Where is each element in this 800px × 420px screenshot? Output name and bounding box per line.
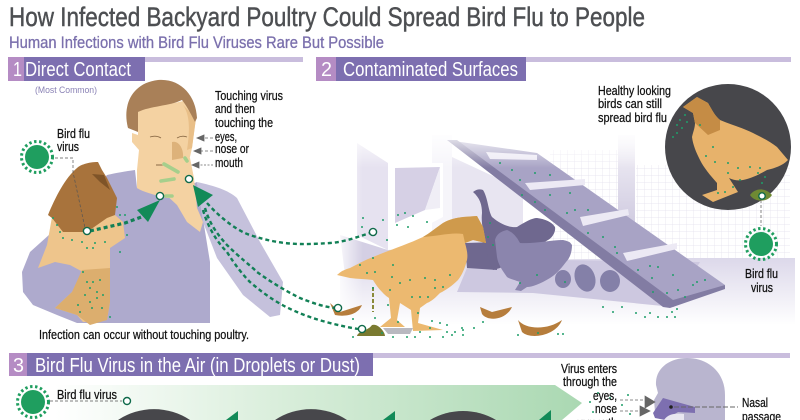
- path markers: [83, 175, 765, 333]
- connector line: [760, 200, 762, 226]
- label: nasal passage: [742, 395, 781, 420]
- label: healthy birds: birds can still: [598, 96, 662, 111]
- pan: [383, 328, 413, 334]
- entry arrows: [620, 396, 655, 416]
- icon: virus: [22, 142, 52, 172]
- nest box: [388, 163, 443, 243]
- inset: healthy looking hen: [665, 84, 791, 210]
- arrowheads: [137, 185, 213, 222]
- man's body: [22, 170, 210, 323]
- section 1 heading: Direct Contact: [25, 59, 131, 81]
- nasal passage: [653, 398, 695, 420]
- green air arrow: [55, 385, 582, 420]
- label: touching virus: nose or: [215, 141, 250, 156]
- dashed transmission paths: [90, 203, 370, 329]
- dark inset circles: [118, 409, 496, 420]
- ramp: [447, 140, 725, 307]
- arrowheads: [226, 410, 551, 420]
- coop wall: [357, 143, 388, 250]
- panel: virus in the air: [9, 353, 790, 420]
- label: healthy birds: Healthy looking: [598, 83, 671, 98]
- label: healthy birds: spread bird flu: [598, 110, 667, 125]
- label: bird flu virus: virus: [751, 280, 773, 295]
- section 3 heading: [9, 353, 790, 377]
- label: bird flu virus: Bird flu: [745, 266, 778, 281]
- icon: virus: [746, 228, 776, 260]
- label: virus enters: nose: [595, 401, 617, 416]
- label: touching virus: [215, 88, 283, 170]
- label: touching virus: Touching virus: [215, 88, 283, 103]
- section 3 heading: 3: [13, 355, 24, 377]
- nest and ramp fade: [335, 130, 795, 168]
- eyes and mouth: [150, 136, 187, 165]
- raised hand: [158, 153, 203, 232]
- section 1 heading: [8, 57, 303, 81]
- label: bird flu virus: [57, 126, 90, 154]
- label: touching virus: and then: [215, 101, 255, 116]
- icon: virus: [18, 386, 48, 418]
- illustration: man holding hen: [22, 80, 283, 325]
- floor: [340, 258, 795, 325]
- virus on fingers: [161, 158, 187, 196]
- label: healthy birds: [598, 83, 671, 125]
- section 3 heading: Bird Flu Virus in the Air (in Droplets or Dust): [35, 355, 360, 377]
- label: touching virus: mouth: [215, 155, 243, 170]
- hen in arms: [38, 215, 125, 322]
- virus dots: air: [143, 387, 630, 416]
- chicks: [555, 261, 620, 295]
- label: touching virus: touching the: [215, 115, 273, 130]
- ramp rungs: [486, 152, 677, 261]
- panel: contaminated surfaces: [316, 57, 795, 336]
- head profile: [654, 358, 725, 420]
- label: virus enters: [561, 361, 617, 420]
- section 2 heading: 2: [321, 59, 332, 81]
- section 1 heading: 1: [13, 59, 22, 81]
- label: bird flu virus: [745, 266, 778, 295]
- label: nasal passage: Nasal: [742, 395, 768, 410]
- label: bird flu virus: Bird flu: [57, 126, 90, 141]
- orange hen: [337, 216, 486, 331]
- purple hens: [473, 189, 555, 270]
- feathers and droppings: [330, 303, 362, 316]
- label: bird flu virus: virus: [57, 139, 79, 154]
- label: infection note: Infection can occur without touching poultry.: [39, 327, 249, 342]
- title: How Infected Backyard Poultry Could Spread Bird Flu to People: [9, 2, 645, 32]
- hair: [126, 80, 197, 132]
- coop illustration: [330, 130, 795, 336]
- label: virus enters: through the: [563, 374, 617, 389]
- label: touching virus: eyes,: [215, 129, 237, 144]
- label: bird flu virus: Bird flu virus: [57, 387, 117, 402]
- panel: direct contact: [8, 57, 303, 342]
- subtitle: Human Infections with Bird Flu Viruses Rare But Possible: [9, 34, 384, 52]
- section 2 heading: [316, 57, 791, 81]
- note: most common: (Most Common): [35, 85, 97, 96]
- section 2 heading: Contaminated Surfaces: [343, 59, 518, 81]
- label: virus enters: Virus enters: [561, 361, 617, 376]
- arrows to eyes nose mouth: [192, 135, 213, 168]
- virus dots: poultry and coop: [53, 115, 765, 337]
- label: virus enters: eyes,: [593, 388, 617, 403]
- post: [618, 135, 635, 257]
- man's head: [132, 100, 196, 198]
